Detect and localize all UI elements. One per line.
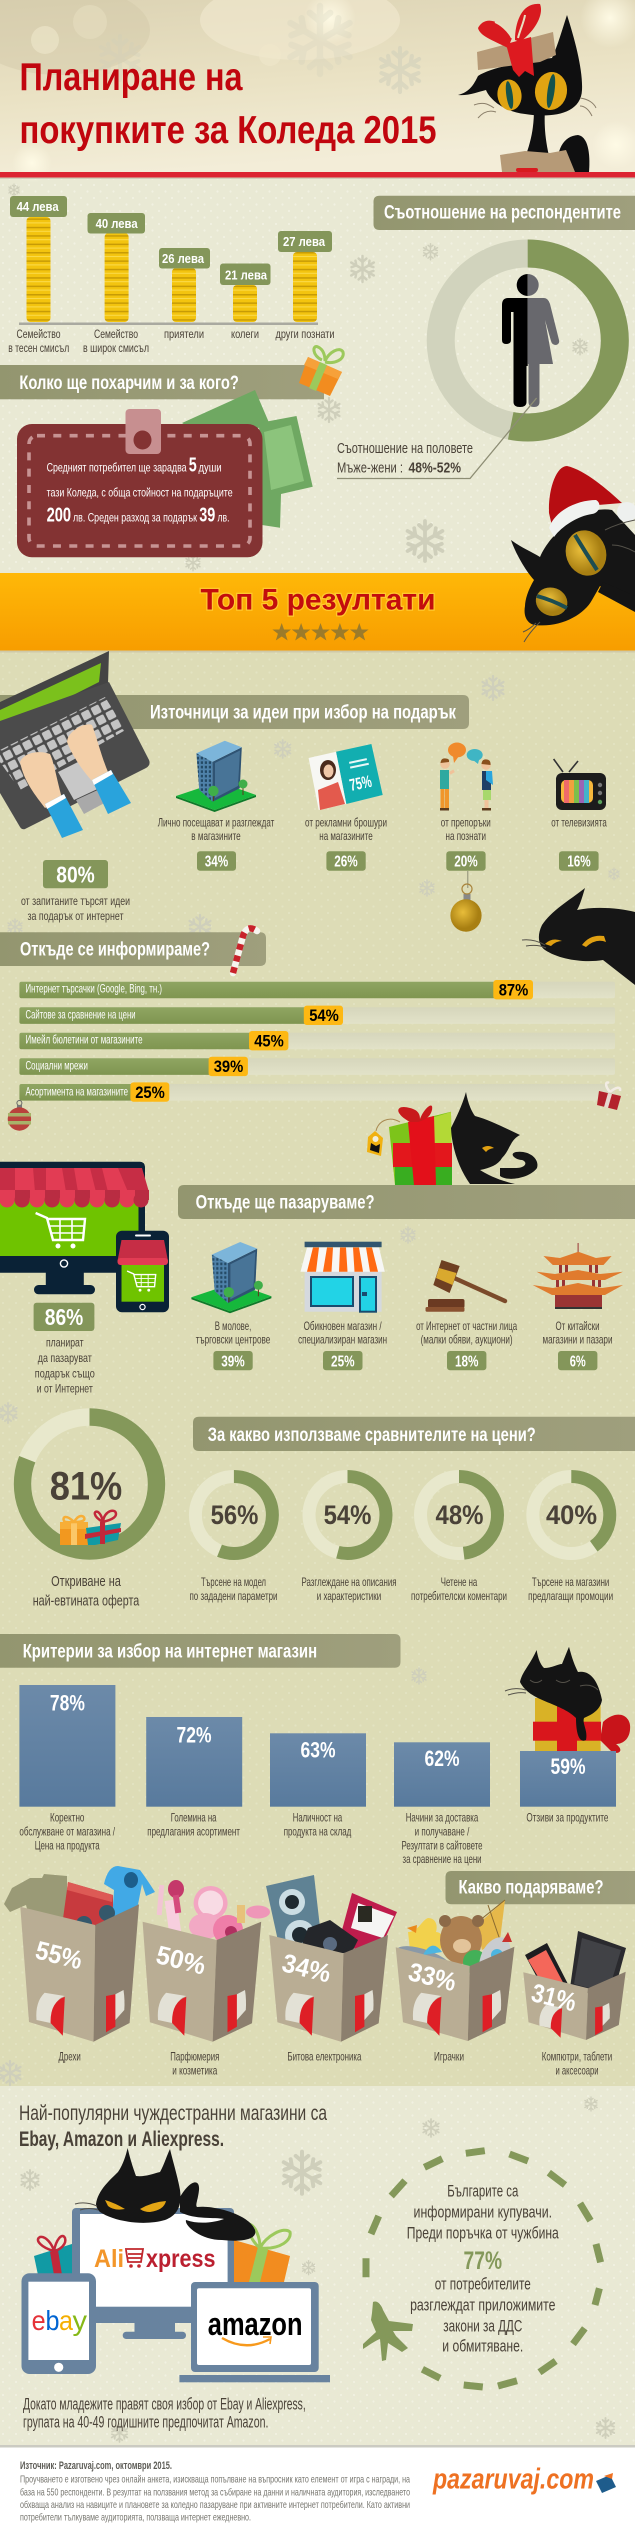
bar 63%: продукта на склад: [284, 1825, 351, 1839]
box: clothes 55%: 55%: [33, 1935, 85, 1975]
callout: informed buyers: разглеждат приложимите: [410, 2296, 556, 2315]
box: electronics 34%: [266, 1875, 397, 2042]
stat: 86%: да пазаруват: [38, 1351, 92, 1365]
box: electronics 34%: 34%: [279, 1948, 334, 1988]
coin stack 26 лева: 26 лева: [162, 251, 205, 266]
illustration: cat with gift lid: [458, 4, 596, 172]
five stars: [272, 623, 369, 640]
stat: 80% from internet: [21, 860, 130, 923]
caption: cheapest offer: Откриване на: [51, 1573, 121, 1590]
donut: gender ratio: [441, 253, 615, 428]
donut: 54%: 54%: [324, 1500, 371, 1530]
gender ratio text: Съотношение на половете: [337, 440, 473, 457]
source text: обхваща анализ на навиците и плановете за коледно пазаруване при активните интернет потребители. Като активни: [20, 2499, 410, 2511]
bar chart: criteria: [19, 1685, 616, 1866]
badge 26%: 26%: [334, 854, 358, 871]
icon: airplane: [363, 2301, 413, 2361]
wallet text: [47, 455, 233, 527]
wallet text: тази Коледа, с обща стойност на подаръците: [47, 486, 233, 500]
caption: Лично посещават и разглеждат: [158, 816, 275, 830]
bar 62%: 62%: [424, 1746, 460, 1771]
icon: gifts: [60, 1511, 121, 1545]
donut: 81%: [22, 1417, 156, 1551]
caption: на познати: [446, 829, 486, 843]
caption: cheapest offer: най-евтината оферта: [33, 1593, 140, 1610]
badge 25%: 25%: [331, 1354, 355, 1371]
caption: [196, 1319, 270, 1347]
bar 72%: 72%: [176, 1723, 212, 1748]
note: age groups: групата на 40-49 годишните предпочитат Amazon.: [23, 2414, 268, 2432]
donut: 40%: 40%: [546, 1500, 597, 1530]
bar 54%: [19, 1006, 615, 1025]
callout: informed buyers: от потребителите: [435, 2274, 531, 2293]
gender ratio text: 48%-52%: [408, 460, 461, 477]
chart captions: [8, 327, 334, 355]
bar 62%: и получаване /: [415, 1825, 470, 1839]
chart: coin stacks: [8, 196, 334, 355]
caption: Обикновен магазин /: [304, 1319, 382, 1333]
place: malls: [191, 1242, 271, 1371]
bar 54%: Сайтове за сравнение на цени: [26, 1007, 136, 1021]
source: television: [551, 759, 607, 871]
icon: laptop with hands: [0, 651, 150, 838]
wallet text: души: [198, 461, 222, 475]
heading: gifts: [446, 1871, 635, 1904]
coin stack 40 лева: [88, 213, 145, 322]
icon: shop monitor: [0, 1162, 149, 1294]
callout: informed buyers: 77%: [464, 2247, 502, 2275]
logo: ebay: a: [59, 2305, 73, 2336]
caption: От китайски: [556, 1319, 600, 1333]
place: auctions: [416, 1260, 517, 1371]
illustration: peeking cat: [522, 888, 635, 985]
bar 45%: [19, 1031, 615, 1050]
caption: в магазините: [191, 829, 241, 843]
bar 45%: Имейл бюлетини от магазините: [26, 1033, 143, 1047]
icon: teal gift: [34, 2236, 80, 2275]
icon: orange gift: [234, 2224, 290, 2282]
callout: informed buyers: Преди поръчка от чужбина: [407, 2223, 559, 2242]
donut: 48%: [411, 1476, 507, 1603]
source text: потребители тълкуваме аудиторията, ползваща интернет ежедневно.: [20, 2512, 251, 2524]
bar 63%: 63%: [300, 1737, 336, 1762]
icon: mall building: [191, 1242, 271, 1313]
box: clothes 55%: [4, 1866, 155, 2042]
icon: shop phone: [116, 1231, 169, 1312]
stat: 86%: планират: [46, 1336, 84, 1350]
wallet text: 39: [199, 505, 215, 527]
contents: electronics: [266, 1875, 397, 1956]
illustration: cat on monitor: [75, 2148, 255, 2241]
wallet clasp: [126, 409, 161, 454]
title: покупките за Коледа 2015: [20, 109, 436, 152]
badge 39%: 39%: [221, 1354, 245, 1371]
donut: 81%: 81%: [50, 1464, 122, 1508]
wallet text: лв.: [218, 511, 230, 525]
callout: informed buyers: Българите са: [447, 2182, 519, 2201]
caption: cheapest offer: [33, 1573, 140, 1610]
panel: what we give: [4, 1866, 635, 2077]
callout: informed buyers: закони за ДДС: [443, 2317, 522, 2336]
left hand: [20, 752, 83, 838]
stat: 86%: [34, 1303, 95, 1395]
donut: 54%: Разглеждане на описания: [302, 1575, 396, 1589]
bar 78%: Цена на продукта: [35, 1838, 100, 1852]
note: age groups: Докато младежите правят своя избор от Ebay и Aliexpress,: [23, 2395, 306, 2413]
bar 25%: 25%: [135, 1083, 165, 1102]
coin stack 44 лева: 44 лева: [17, 199, 59, 214]
caption: от телевизията: [551, 816, 607, 830]
coin stack 40 лева: 40 лева: [96, 216, 138, 231]
aliexpress monitor: [72, 2208, 234, 2339]
caption: на магазините: [319, 829, 373, 843]
box: toys 33%: 33%: [406, 1956, 459, 1997]
box: computers 31%: [523, 1931, 626, 2040]
icon: striped ornament: [8, 1100, 31, 1131]
box captions: Играчки: [434, 2050, 464, 2064]
heading: criteria: [0, 1634, 400, 1668]
heading: shopping places: [178, 1185, 635, 1219]
place: chinese shops: [533, 1243, 623, 1371]
illustration: cat with green gift: [367, 1092, 537, 1185]
awning: [0, 1168, 149, 1208]
logo: aliexpress: [94, 2245, 216, 2273]
icon: retro tv: [554, 759, 606, 810]
illustration: santa cat: [511, 466, 635, 642]
logo: aliexpress: Ali: [94, 2245, 124, 2273]
place: regular shop: [298, 1242, 387, 1371]
icon: cart: [36, 1213, 85, 1248]
source: stores: [158, 741, 275, 871]
icon: brochure: 75%: [348, 772, 373, 795]
bar 59%: 59%: [550, 1754, 586, 1779]
caption: [305, 816, 387, 843]
bar 25%: [19, 1082, 615, 1102]
panel: where we inform ourselves: [0, 928, 621, 1131]
bar 54%: 54%: [309, 1006, 339, 1025]
box: toys 33%: [393, 1900, 517, 2041]
coin stack 21 лева: 21 лева: [225, 268, 268, 282]
bar 62%: Резултати в сайтовете: [402, 1838, 483, 1852]
heading: top 5: Топ 5 резултати: [200, 584, 436, 616]
box captions: Парфюмерия: [170, 2050, 219, 2064]
caption: търговски центрове: [196, 1333, 270, 1347]
bar 72%: [146, 1717, 242, 1839]
bar chart: information channels: [19, 980, 615, 1102]
chart captions: други познати: [276, 327, 334, 341]
bar 87%: [19, 980, 615, 1000]
chart captions: Семейство: [94, 327, 138, 341]
heading: information sources: Откъде се информираме?: [20, 940, 210, 960]
bar 78%: 78%: [50, 1691, 85, 1716]
coin stack 27 лева: [278, 231, 332, 322]
bar 78%: обслужване от магазина /: [19, 1825, 115, 1839]
heading: spending: [0, 365, 324, 399]
coin stack 26 лева: [159, 248, 210, 322]
stat: 86%: 86%: [45, 1304, 83, 1330]
donut: 48%: потребителски коментари: [411, 1589, 507, 1603]
box: cosmetics 50%: [143, 1880, 270, 2042]
panel: foreign shops: [19, 2102, 601, 2432]
source: brochures: [305, 744, 387, 871]
icon: man and woman figure: [502, 274, 559, 407]
panel: sources of ideas: [0, 651, 607, 923]
panel: respondents ratio: [337, 196, 635, 478]
panel: where we will shop: [0, 1162, 635, 1395]
source text: Източник: Pazaruvaj.com, октомври 2015.: [20, 2460, 172, 2472]
heading: foreign shops: Ebay, Amazon и Aliexpress.: [19, 2128, 224, 2151]
bar 59%: [520, 1751, 616, 1825]
box: cosmetics 50%: 50%: [153, 1939, 209, 1981]
ebay phone: [22, 2273, 96, 2374]
amazon laptop: [179, 2282, 330, 2382]
badge 34%: 34%: [205, 854, 228, 871]
contents: devices: [525, 1931, 626, 2000]
chart captions: Семейство: [16, 327, 61, 341]
icon: candy cane: [233, 928, 257, 973]
source text: база на 550 респонденти. В резултат на ползвания метод за събиране на данни и наличната аудитория, изследването: [20, 2486, 410, 2498]
logo: ebay: [32, 2305, 87, 2336]
bar 78%: [19, 1685, 115, 1852]
logo: ebay: e: [32, 2305, 46, 2336]
bar 45%: 45%: [254, 1031, 284, 1050]
box: computers 31%: 31%: [529, 1977, 579, 2017]
heading: idea sources: [0, 695, 469, 729]
badge 16%: 16%: [567, 854, 591, 871]
right hand: [67, 724, 131, 814]
logo: ebay: b: [46, 2305, 60, 2336]
coin stack 21 лева: [220, 264, 270, 322]
donut: 54%: и характеристики: [317, 1589, 381, 1603]
heading: foreign shops: [19, 2102, 327, 2151]
logo: aliexpress: xpress: [146, 2245, 216, 2273]
caption: [416, 1319, 517, 1347]
bar 63%: Наличност на: [293, 1811, 342, 1825]
icon: golden ornament: [450, 871, 482, 932]
panel: spending: [0, 347, 343, 557]
heading: information sources: [0, 932, 266, 966]
red divider stripe: [0, 172, 635, 179]
wallet text: 200: [47, 505, 71, 527]
bar 62%: Начини за доставка: [406, 1811, 478, 1825]
bar 39%: 39%: [214, 1057, 243, 1076]
contents: clothes: [4, 1866, 155, 1932]
title: [20, 56, 436, 152]
top 5 band: [0, 573, 635, 652]
donut: 56%: по зададени параметри: [190, 1589, 278, 1603]
bar 87%: Интернет търсачки (Google, Bing, тн.): [26, 982, 162, 996]
bar 62%: [394, 1742, 490, 1866]
contents: toys: [393, 1900, 517, 1984]
icon: two people talking: [440, 742, 493, 810]
box captions: и козметика: [172, 2063, 218, 2077]
chart captions: в широк смисъл: [83, 341, 149, 355]
caption: [158, 816, 275, 843]
donut: 56%: [190, 1476, 278, 1603]
gender ratio text: [337, 440, 473, 477]
pointer line: [337, 398, 537, 478]
donut: 56%: Търсене на модел: [201, 1575, 266, 1589]
bar 63%: [270, 1733, 366, 1839]
caption: [298, 1319, 387, 1347]
stat: 80% from internet: за подарък от интернет: [28, 909, 124, 923]
badge 6%: 6%: [570, 1354, 586, 1371]
donut: 48%: Четене на: [441, 1575, 477, 1589]
stat: 86%: подарък също: [35, 1366, 95, 1380]
heading: comparators: [193, 1417, 635, 1451]
note: age groups: [23, 2395, 306, 2432]
panel: online shop criteria: [0, 1634, 630, 1866]
badge 18%: 18%: [455, 1354, 478, 1371]
donut: 48%: 48%: [436, 1500, 484, 1530]
heading: idea sources: Източници за идеи при избор на подарък: [150, 702, 456, 724]
heading: criteria: Критерии за избор на интернет магазин: [23, 1642, 317, 1662]
heading: shopping places: Откъде ще пазаруваме?: [196, 1192, 375, 1214]
caption: (малки обяви, аукциони): [421, 1333, 513, 1347]
bar 72%: Големина на: [171, 1811, 217, 1825]
caption: от Интернет от частни лица: [416, 1319, 517, 1333]
illustration: sleeping cat on gift: [505, 1647, 630, 1753]
icon: banknotes: [182, 390, 313, 528]
badge 20%: 20%: [454, 854, 478, 871]
icon: storefront: [300, 1242, 385, 1312]
bar 39%: Социални мрежи: [26, 1059, 88, 1073]
callout: informed buyers: информирани купувачи.: [414, 2202, 552, 2221]
chart captions: колеги: [231, 327, 259, 341]
gender ratio text: Мъже-жени :: [337, 460, 403, 477]
chart captions: в тесен смисъл: [8, 341, 69, 355]
logo: pazaruvaj.com: pazaruvaj.com: [432, 2463, 594, 2495]
caption: В молове,: [215, 1319, 251, 1333]
caption: от препоръки: [441, 816, 491, 830]
wallet text: лв. Среден разход за подарък: [73, 511, 198, 525]
source text: Проучването е изготвено чрез онлайн анкета, изискваща попълване на въпросник като елемент от игра с награди, на: [20, 2473, 410, 2485]
box captions: и аксесоари: [556, 2063, 598, 2077]
donut: 40%: [528, 1476, 613, 1603]
source text: [20, 2460, 410, 2524]
wallet text: Средният потребител ще зарадва: [47, 461, 187, 475]
heading: foreign shops: Най-популярни чуждестранни магазини са: [19, 2102, 327, 2125]
gift tag: [367, 1119, 400, 1156]
icon: pagoda: [533, 1243, 623, 1309]
box captions: Битова електроника: [287, 2050, 362, 2064]
donut: 54%: [302, 1476, 396, 1603]
icon: orange gift: [299, 347, 343, 396]
bar 78%: Коректно: [50, 1811, 85, 1825]
box captions: [59, 2050, 612, 2077]
title: Планиране на: [20, 56, 243, 99]
coin stack 44 лева: [10, 196, 67, 322]
bar 25%: Асортимента на магазините: [26, 1084, 128, 1098]
wallet: [17, 409, 262, 557]
bar 39%: [19, 1057, 615, 1076]
source: recommendations: [440, 742, 493, 871]
box captions: Дрехи: [59, 2050, 81, 2064]
bar 87%: 87%: [499, 980, 528, 1000]
heading: respondents: [374, 196, 635, 230]
donut: 56%: 56%: [211, 1500, 258, 1530]
chart captions: приятели: [164, 327, 204, 341]
footer: [20, 2460, 616, 2524]
panel: price comparison: [22, 1417, 635, 1610]
icon: office building: [176, 741, 256, 812]
caption: [542, 1319, 612, 1347]
logo: ebay: y: [72, 2305, 87, 2336]
header banner: [0, 0, 635, 183]
dashed flight path: [366, 2151, 601, 2387]
icon: small red gift: [597, 1082, 621, 1110]
stat: 80% from internet: от запитаните търсят идеи: [21, 894, 130, 908]
callout: informed buyers: [407, 2182, 559, 2356]
icon: gavel: [426, 1260, 505, 1312]
caption: специализиран магазин: [298, 1333, 387, 1347]
caption: [441, 816, 491, 843]
callout: informed buyers: и обмитяване.: [442, 2337, 523, 2356]
stat: 80% from internet: 80%: [56, 862, 95, 888]
contents: cosmetics: [157, 1880, 270, 1945]
bar 72%: предлагания асортимент: [147, 1825, 240, 1839]
stat: 86%: и от Интернет: [37, 1381, 93, 1395]
wallet text: 5: [189, 455, 197, 477]
bar 62%: за сравнение на цени: [402, 1852, 482, 1866]
caption: от рекламни брошури: [305, 816, 387, 830]
coin stack 27 лева: 27 лева: [283, 234, 326, 249]
heading: spending: Колко ще похарчим и за кого?: [19, 373, 239, 394]
logo: amazon: amazon: [208, 2306, 302, 2342]
heading: comparators: За какво използваме сравнителите на цени?: [208, 1425, 536, 1446]
